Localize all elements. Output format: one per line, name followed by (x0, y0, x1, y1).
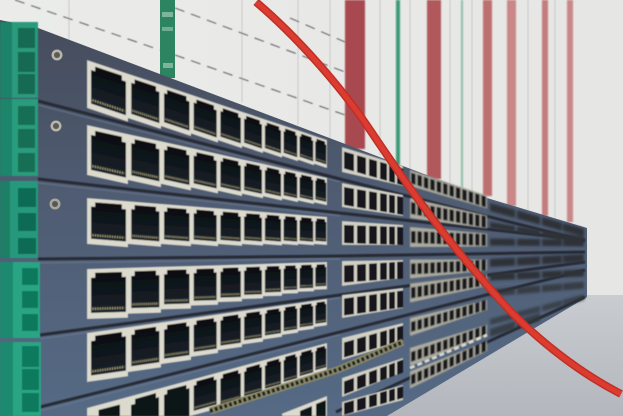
row 4 ports (87, 262, 327, 319)
second section ports (342, 147, 403, 416)
wall chart lines (15, 0, 555, 218)
green rack handles (0, 22, 41, 416)
green label strip (160, 0, 175, 78)
third section ports (410, 170, 487, 388)
row 2 ports (87, 125, 327, 205)
row 7 ports (282, 396, 327, 416)
row 3 ports (87, 198, 327, 247)
red cable (256, 2, 621, 394)
floor (380, 295, 623, 416)
mounting screws (50, 50, 62, 210)
wall coloured bars (345, 0, 573, 222)
row 5 ports (87, 299, 327, 382)
chassis seams (38, 101, 585, 412)
row 1 ports (87, 60, 327, 168)
row 6 ports (87, 343, 327, 416)
patterned strip (210, 335, 487, 411)
far blurred switch ports (490, 207, 585, 333)
